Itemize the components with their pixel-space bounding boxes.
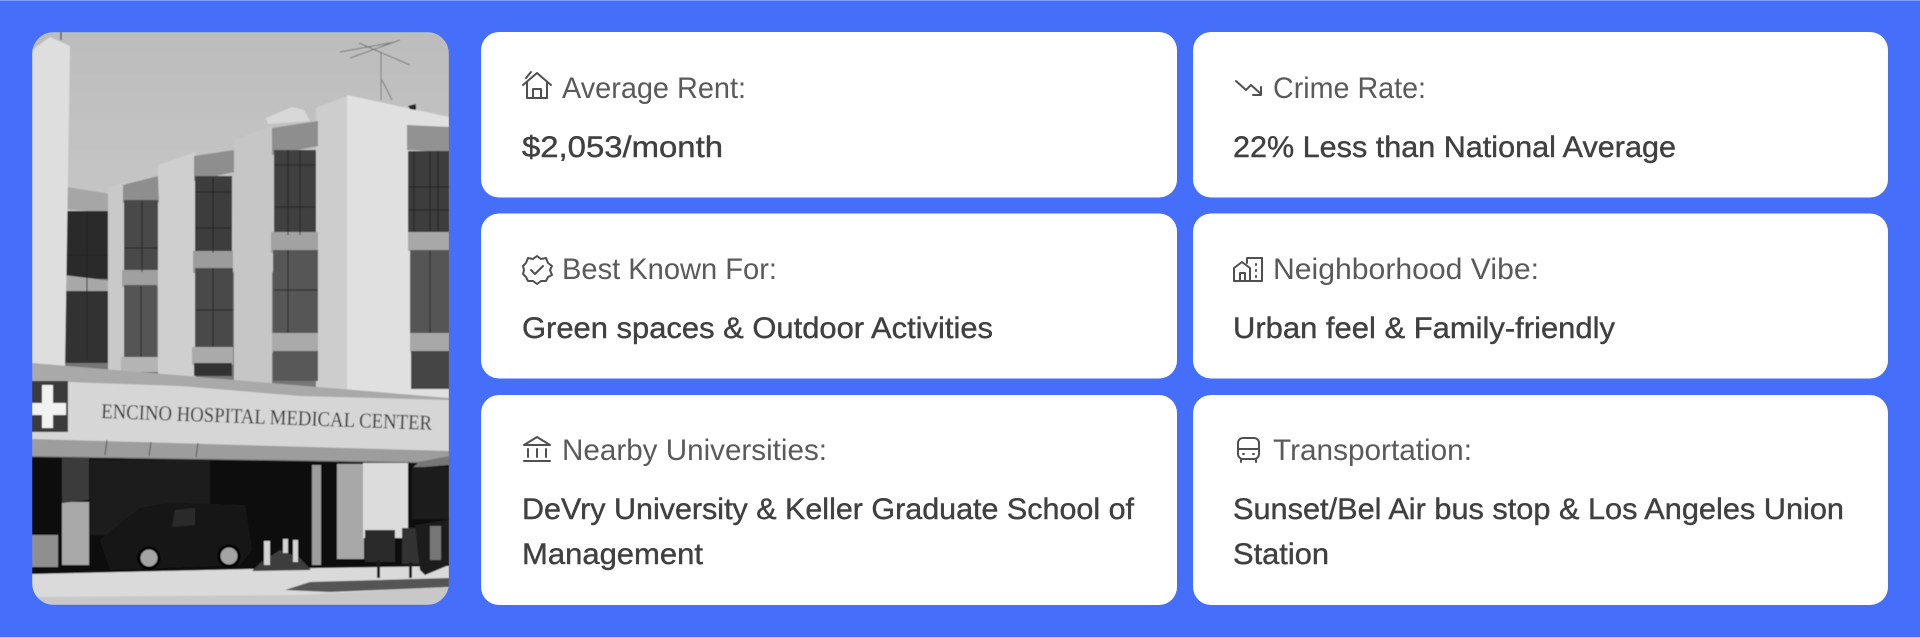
icon: house: [523, 72, 551, 98]
icon: check badge: [523, 256, 552, 284]
card: crime rate: [1193, 32, 1888, 198]
label: average rent: Average Rent:: [562, 72, 746, 105]
card: nearby universities: [481, 395, 1177, 605]
bay 3: [272, 121, 318, 155]
mullions: [66, 150, 449, 360]
value: nearby universities: Management: [522, 538, 703, 571]
bay 4: [407, 125, 449, 152]
canopy fascia: [32, 362, 449, 400]
awning: [32, 439, 449, 462]
card: neighborhood vibe: [1193, 214, 1888, 378]
left tower: [32, 37, 70, 368]
low section: [67, 187, 108, 212]
label: best known for: Best Known For:: [562, 253, 777, 286]
value: transportation: Station: [1233, 538, 1329, 571]
icon: bus: [1238, 438, 1259, 462]
card: transportation: [1193, 395, 1888, 605]
label: neighborhood vibe: Neighborhood Vibe:: [1273, 253, 1539, 286]
value: best known for: Green spaces & Outdoor Activities: [522, 312, 993, 345]
hospital cross sign: [32, 381, 68, 433]
car: [100, 503, 252, 570]
label: transportation: Transportation:: [1273, 434, 1472, 467]
building sign text: ENCINO HOSPITAL MEDICAL CENTER: [101, 399, 432, 435]
value: transportation: Sunset/Bel Air bus stop & Los Angeles Union: [1233, 493, 1844, 526]
dark entrance: [32, 457, 449, 575]
card: average rent: [481, 32, 1177, 198]
value: rent: $2,053/month: [522, 131, 723, 164]
bay 2: [194, 150, 234, 181]
value: nearby universities: DeVry University & Keller Graduate School of: [522, 493, 1135, 526]
value: neighborhood vibe: Urban feel & Family-friendly: [1233, 312, 1615, 345]
bushes and bollards: [252, 550, 311, 571]
value: crime rate: 22% Less than National Average: [1233, 131, 1676, 164]
card: best known for: [481, 214, 1177, 378]
news boxes: [365, 520, 449, 578]
icon: trending down: [1236, 81, 1261, 95]
icon: university building: [524, 437, 550, 461]
photo: Encino Hospital Medical Center building: [32, 32, 449, 605]
value: transportation: [1233, 493, 1844, 571]
label: crime rate: Crime Rate:: [1273, 72, 1426, 105]
antenna: [340, 40, 410, 100]
icon: city houses: [1234, 258, 1262, 281]
label: nearby universities: Nearby Universities:: [562, 434, 827, 467]
value: nearby universities: [522, 493, 1135, 571]
bay 1: [123, 176, 159, 203]
wall sections: [158, 152, 196, 385]
sidewalk: [32, 565, 449, 598]
